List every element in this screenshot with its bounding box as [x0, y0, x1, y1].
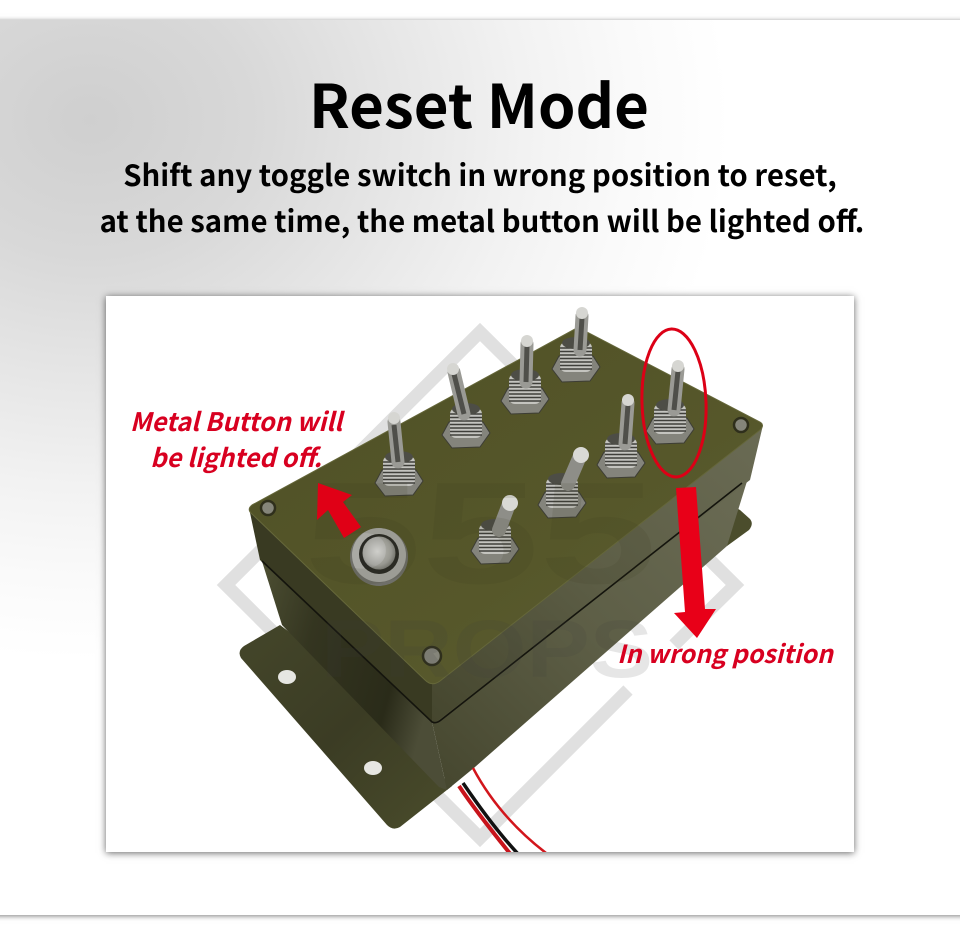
watermark text: PROPS — [321, 604, 653, 695]
watermark text — [304, 452, 657, 695]
watermark text: 555 — [304, 452, 657, 614]
panel: product photo card — [106, 296, 854, 852]
enclosure box — [240, 328, 763, 829]
switch 2 — [442, 363, 490, 448]
title: Reset Mode — [309, 59, 649, 146]
arrow to wrong position label — [674, 487, 716, 638]
wires — [459, 768, 550, 856]
subtitle text — [100, 153, 864, 241]
switch 7: wrong position — [646, 360, 694, 444]
toggle switches — [375, 307, 694, 564]
switch 5 — [597, 394, 645, 478]
label: metal button: Metal Button will — [130, 403, 345, 439]
subtitle text: at the same time, the metal button will be lighted off. — [100, 199, 864, 241]
subtitle text: Shift any toggle switch in wrong position to reset, — [123, 153, 837, 195]
label: wrong position: In wrong position — [617, 635, 835, 671]
switch 6 — [538, 447, 589, 518]
lid top face — [249, 328, 762, 684]
label: metal button second line: be lighted off. — [150, 439, 322, 475]
metal push button — [350, 528, 408, 586]
mounting holes — [278, 670, 382, 775]
lower box right side — [432, 478, 748, 790]
lid left side — [249, 508, 432, 722]
lower box left side — [260, 555, 447, 790]
watermark diamond — [226, 332, 735, 838]
switch 8 — [471, 495, 519, 564]
switch 1 — [375, 412, 423, 496]
mounting flange left — [240, 625, 452, 829]
switch 4 — [552, 307, 600, 382]
arrow to metal button label — [317, 483, 361, 538]
switch 3 — [501, 335, 549, 414]
corner screws — [261, 418, 748, 665]
mounting flange right — [722, 506, 752, 546]
lid right side — [432, 425, 763, 722]
highlight ellipse around switch — [639, 328, 709, 478]
